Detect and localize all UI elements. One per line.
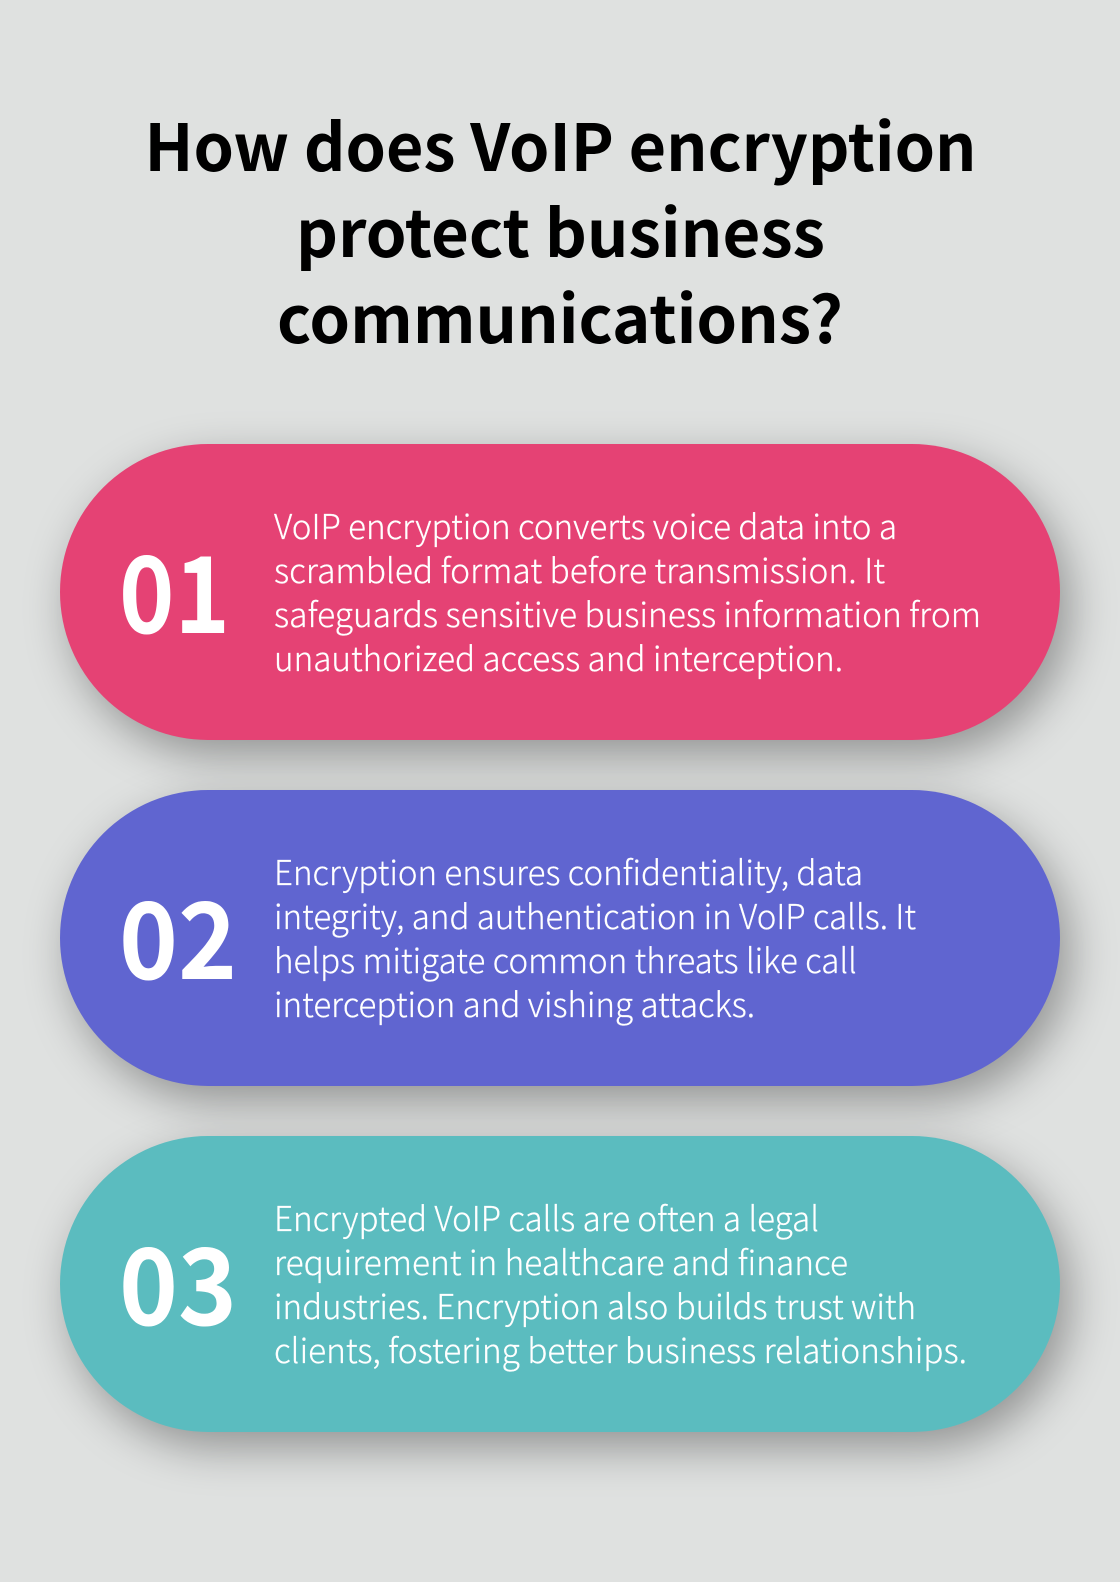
title — [144, 96, 976, 362]
title: protect business — [296, 182, 825, 276]
text: step 02 description: helps mitigate common threats like call — [274, 934, 857, 983]
title: How does VoIP encryption — [144, 96, 976, 190]
number: 02: 02 — [119, 856, 237, 1010]
text: step 01 description: safeguards sensitive business information from — [274, 588, 981, 637]
text: step 03 description: Encrypted VoIP calls are often a legal — [274, 1192, 819, 1241]
text: step 02 description: Encryption ensures confidentiality, data — [274, 846, 863, 895]
text: step 01 description: VoIP encryption converts voice data into a — [274, 500, 897, 549]
panel: step 02 — [60, 790, 1060, 1086]
text: step 03 description: requirement in healthcare and finance — [274, 1236, 848, 1285]
text: step 01 description — [274, 500, 981, 681]
title: communications? — [277, 268, 843, 362]
pill: step 01 background — [60, 444, 1060, 740]
text: step 02 description: integrity, and authentication in VoIP calls. It — [274, 890, 916, 939]
text: step 02 description — [274, 846, 916, 1027]
panel: step 03 — [60, 1136, 1060, 1432]
text: step 03 description: industries. Encryption also builds trust with — [274, 1280, 916, 1329]
text: step 01 description: scrambled format before transmission. It — [274, 544, 885, 593]
text: step 03 description: clients, fostering better business relationships. — [274, 1324, 967, 1373]
number: 01: 01 — [119, 510, 230, 664]
pill: step 02 background — [60, 790, 1060, 1086]
panel: step 01 — [60, 444, 1060, 740]
pill: step 03 background — [60, 1136, 1060, 1432]
number: 03: 03 — [119, 1202, 237, 1356]
text: step 01 description: unauthorized access and interception. — [274, 632, 843, 681]
text: step 02 description: interception and vishing attacks. — [274, 978, 755, 1027]
text: step 03 description — [274, 1192, 967, 1373]
